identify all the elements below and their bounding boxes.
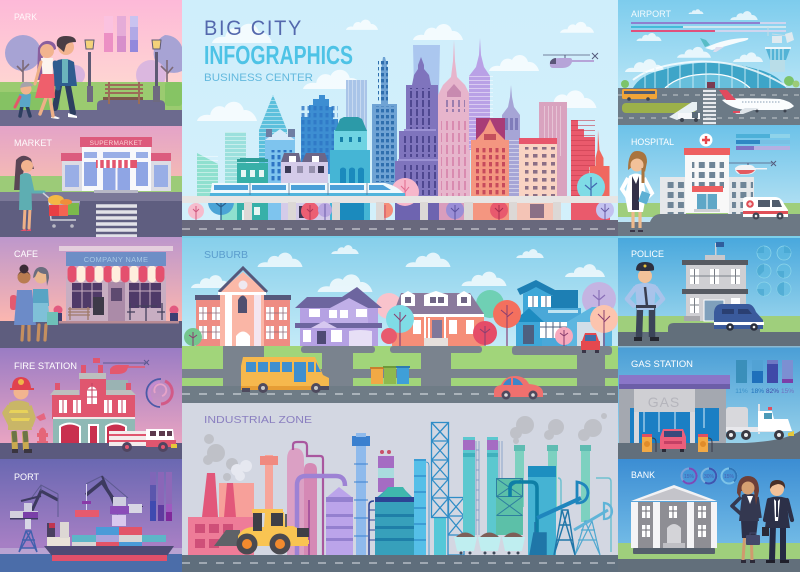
building: police station <box>682 242 748 321</box>
figure: businesswoman <box>732 476 760 563</box>
icon: long green vehicle <box>622 103 696 113</box>
road <box>182 555 618 572</box>
label: suburb: SUBURB <box>204 250 248 261</box>
icon: helicopter <box>103 360 149 374</box>
icon: fire truck <box>109 429 177 452</box>
building: gas station: GAS <box>648 394 680 410</box>
building: hospital <box>660 134 754 214</box>
icon: ore carts <box>454 532 525 554</box>
icon: school bus <box>241 357 329 393</box>
back trees <box>376 282 616 319</box>
figure: shopper with cart <box>14 156 44 231</box>
apron <box>618 88 800 125</box>
striped chimney <box>378 450 394 492</box>
mint chimneys <box>514 445 591 522</box>
panel: cafe <box>0 237 182 348</box>
blue tower <box>352 433 370 555</box>
icon: left crane <box>10 485 58 552</box>
crosswalk <box>96 206 137 236</box>
coral house <box>392 291 484 346</box>
clouds <box>625 9 763 72</box>
road <box>182 386 618 403</box>
airport terminal <box>621 62 800 88</box>
smoke <box>203 413 607 481</box>
panel: park <box>0 0 182 126</box>
icon: pink car <box>660 429 686 452</box>
lilac silo <box>326 487 353 555</box>
blue building with pipe <box>496 466 611 555</box>
furniture: bench board table <box>54 297 178 321</box>
grass <box>182 346 618 386</box>
building: fire station <box>50 365 136 443</box>
label: gas station: GAS STATION <box>631 359 693 369</box>
title: BUSINESS CENTER <box>204 72 313 84</box>
icon: helicopter <box>729 161 776 174</box>
icon: street lamps <box>85 40 161 102</box>
building: cafe <box>59 246 179 324</box>
road <box>618 323 800 347</box>
front trees <box>184 300 618 351</box>
panel: suburb <box>182 238 618 403</box>
label: market: MARKET <box>14 138 52 148</box>
teal tank <box>369 487 414 555</box>
icon: trash bins <box>370 366 410 384</box>
clouds <box>191 245 605 292</box>
icon: plane in sky <box>700 38 748 52</box>
bar chart: gas: 82% <box>766 388 779 395</box>
label: police: POLICE <box>631 249 664 259</box>
crosswalk <box>703 91 716 123</box>
trees behind viaduct <box>188 173 614 220</box>
icon: bench <box>103 82 143 104</box>
bar chart: gas: 18% <box>751 388 764 395</box>
school <box>195 268 291 346</box>
road <box>182 220 618 236</box>
figure: child <box>15 82 33 116</box>
bar chart: gas <box>735 360 794 395</box>
icon: right crane <box>75 476 143 526</box>
icon: stairs truck <box>669 102 700 122</box>
label: port: PORT <box>14 472 39 482</box>
clouds <box>197 20 596 121</box>
label: bank: BANK <box>631 470 655 480</box>
icon: red car <box>581 333 600 353</box>
figure: woman <box>35 41 56 116</box>
label: industrial zone: INDUSTRIAL ZONE <box>204 414 312 426</box>
icon: flag <box>93 358 100 367</box>
icon: ambulance <box>743 197 788 220</box>
road <box>618 214 800 237</box>
pie icons <box>757 246 791 296</box>
orange tower <box>260 455 278 510</box>
building: cafe: COMPANY NAME <box>84 255 148 264</box>
pink columns and pipes <box>287 442 345 555</box>
building: supermarket: SUPERMARKET <box>90 140 142 147</box>
figure: man <box>51 36 77 119</box>
icon: shopping cart <box>43 193 80 228</box>
icon: helicopter <box>543 53 598 68</box>
label: fire station: FIRE STATION <box>14 361 77 371</box>
panel: big city <box>182 0 618 238</box>
figure: businessman <box>762 480 792 563</box>
figure: doctor <box>622 151 652 232</box>
title <box>204 17 353 84</box>
driveways and sidewalks <box>182 346 618 386</box>
chart: donut <box>146 379 172 407</box>
progress rings: 30% <box>704 474 715 480</box>
title: INFOGRAPHICS <box>204 40 353 70</box>
progress rings: 15% <box>724 474 735 480</box>
teal chimneys <box>463 437 502 537</box>
bar chart: gas: 11% <box>735 388 748 395</box>
panel: bank <box>618 459 800 572</box>
icon: control tower <box>765 27 794 72</box>
panel: market <box>0 126 182 237</box>
panel: port <box>0 459 182 572</box>
progress rings <box>682 468 736 484</box>
panel: hospital <box>618 125 800 238</box>
building: bank <box>631 485 717 554</box>
label: park: PARK <box>14 12 37 22</box>
panel: industrial zone <box>182 400 618 572</box>
bar chart: port <box>150 472 172 521</box>
skyline <box>197 38 610 220</box>
label: cafe: CAFE <box>14 249 38 259</box>
blue tall column <box>414 459 429 555</box>
park trees <box>5 35 182 95</box>
blue house <box>513 280 612 346</box>
panel: police <box>618 238 800 347</box>
icon: hydrant <box>37 428 48 443</box>
icon: coral car <box>494 376 543 400</box>
label: hospital: HOSPITAL <box>631 137 674 147</box>
bar chart: gas: 15% <box>781 388 794 395</box>
icon: bulldozer <box>214 509 309 554</box>
pink factory <box>188 473 254 555</box>
lattice towers <box>432 422 464 555</box>
lower buildings below viaduct <box>221 202 610 220</box>
lilac house <box>295 287 382 346</box>
icon: pump jacks <box>530 482 612 555</box>
train <box>210 183 405 196</box>
panel: fire station <box>0 348 182 459</box>
building: gas station <box>619 375 730 443</box>
figure: police officer <box>627 262 663 341</box>
icon: fuel pumps <box>642 434 712 452</box>
panel: airport <box>618 0 800 125</box>
label: airport: AIRPORT <box>631 9 672 19</box>
progress rings: 15% <box>684 474 695 480</box>
title: BIG CITY <box>204 17 303 40</box>
icon: police van <box>714 304 764 331</box>
panel: gas station <box>618 346 800 459</box>
figure: firefighter <box>5 377 46 453</box>
figures: two women <box>10 264 58 340</box>
icon: container ship <box>44 522 174 561</box>
icon: bus <box>622 89 657 101</box>
bars: hospital <box>736 134 790 150</box>
bar chart: park <box>104 16 138 52</box>
bars: airport <box>631 22 786 32</box>
building: supermarket <box>61 137 171 193</box>
park road <box>0 100 182 126</box>
icon: plane on ground <box>719 90 794 114</box>
icon: tanker truck <box>726 404 794 440</box>
viaduct <box>182 196 618 220</box>
